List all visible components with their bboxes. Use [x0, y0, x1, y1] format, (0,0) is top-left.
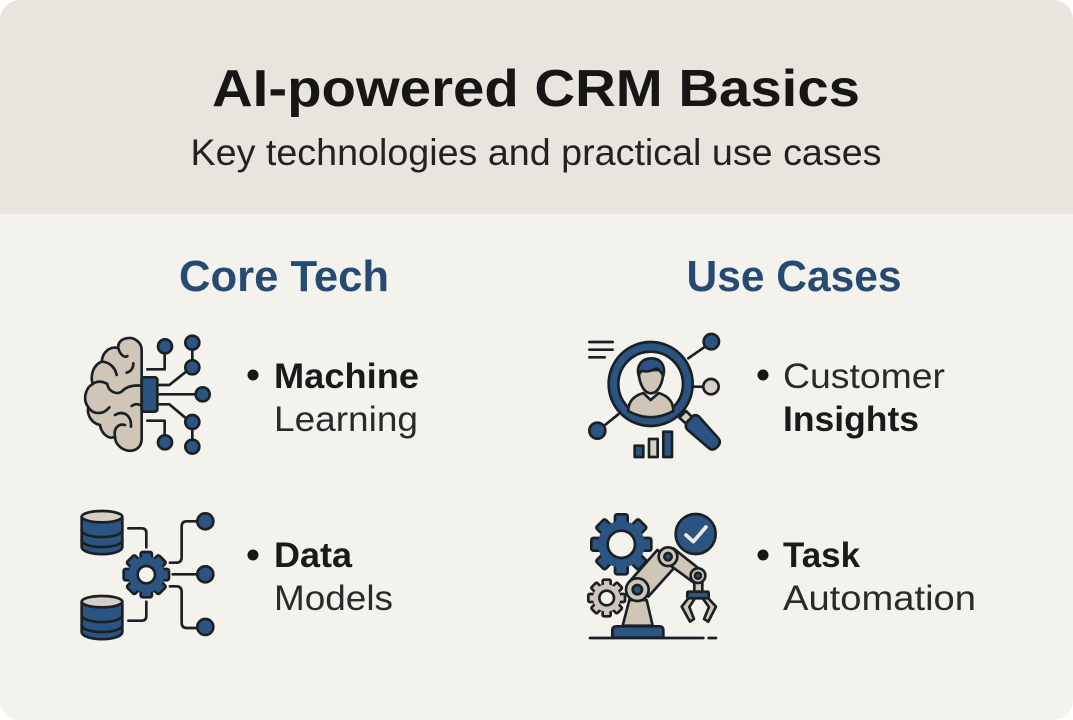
list item: Machine Learning: Machine — [274, 357, 419, 396]
list item: Customer Insights: Insights — [783, 400, 919, 439]
heading: Core Tech: Core Tech — [179, 252, 389, 301]
title: AI-powered CRM Basics — [212, 60, 860, 118]
list item: Task Automation: Automation — [783, 579, 976, 618]
list item: Machine Learning: Learning — [274, 400, 418, 439]
list item: Task Automation — [758, 536, 976, 618]
list item: Data Models: Data — [274, 536, 353, 575]
list item: Data Models: Models — [274, 579, 393, 618]
subtitle: Key technologies and practical use cases — [190, 132, 882, 173]
heading: Use Cases: Use Cases — [686, 252, 902, 301]
list item: Customer Insights — [758, 357, 945, 439]
icon: customer insights magnifier — [589, 334, 720, 457]
list item: Machine Learning — [248, 357, 419, 439]
icon: data models — [82, 511, 213, 639]
list item: Task Automation: Task — [783, 536, 861, 575]
icon: task automation robot arm — [588, 514, 716, 638]
list item: Data Models — [248, 536, 393, 618]
list item: Customer Insights: Customer — [783, 357, 945, 396]
icon: brain with circuit — [85, 336, 210, 454]
